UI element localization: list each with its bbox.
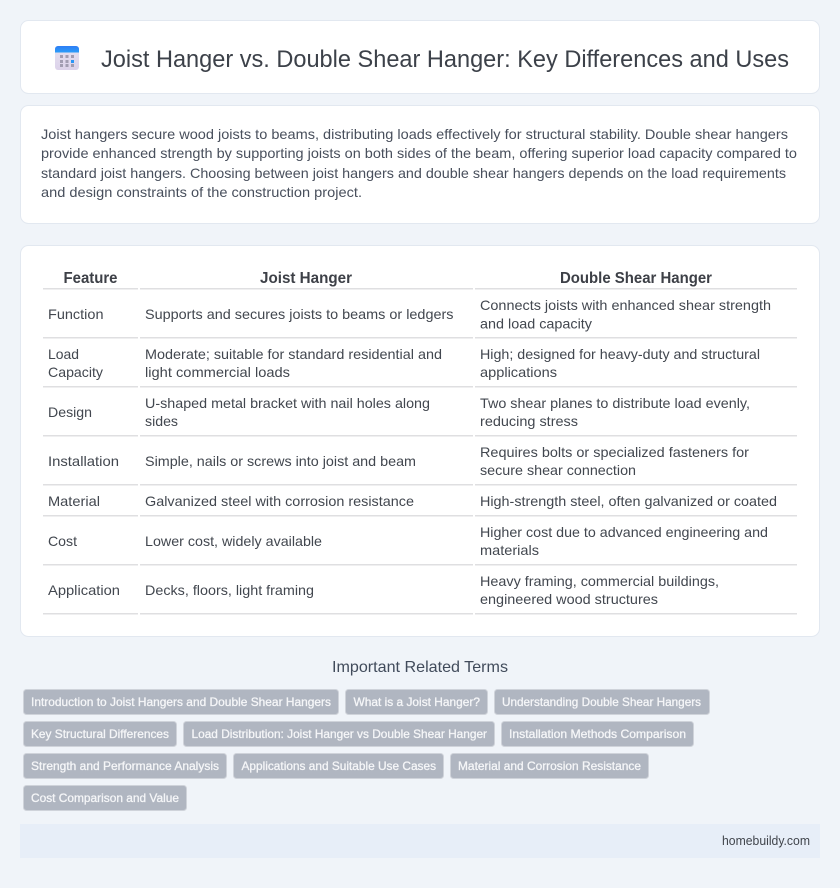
panel: related term tags: Cost Comparison and Value bbox=[31, 791, 179, 805]
row: cost: materials bbox=[480, 542, 539, 558]
title: Joist Hanger vs. Double Shear Hanger: Key Differences and Uses bbox=[101, 46, 789, 73]
row: application: Application bbox=[48, 582, 120, 598]
panel: related term tags: Strength and Performance Analysis bbox=[31, 759, 219, 773]
row: material bbox=[43, 493, 797, 516]
row: load capacity: light commercial loads bbox=[145, 364, 290, 380]
row: installation bbox=[43, 444, 797, 486]
row: design: reducing stress bbox=[480, 413, 578, 429]
row: cost: Lower cost, widely available bbox=[145, 533, 322, 549]
panel: related term tags: Material and Corrosion Resistance bbox=[458, 759, 641, 773]
row: application: Heavy framing, commercial buildings, bbox=[480, 573, 719, 589]
panel: related term tags: Applications and Suitable Use Cases bbox=[242, 759, 436, 773]
row: material: Galvanized steel with corrosion resistance bbox=[145, 493, 414, 509]
panel: related term tags bbox=[24, 690, 710, 810]
row: design bbox=[43, 395, 797, 436]
row: load capacity: Load bbox=[48, 346, 79, 362]
row: installation: Simple, nails or screws into joist and beam bbox=[145, 453, 416, 469]
intro paragraph: standard joist hangers. Choosing between joist hangers and double shear hangers depends on the load requirements bbox=[41, 165, 786, 181]
panel: related term tags: Introduction to Joist Hangers and Double Shear Hangers bbox=[31, 695, 331, 709]
panel: introduction bbox=[20, 106, 820, 224]
intro paragraph bbox=[41, 126, 797, 200]
row: cost bbox=[43, 524, 797, 566]
row: cost: Cost bbox=[48, 533, 77, 549]
panel: page title card bbox=[20, 20, 820, 94]
footer: homebuildy.com bbox=[722, 833, 810, 848]
intro paragraph: and design constraints of the construction project. bbox=[41, 184, 362, 200]
table header row: Feature bbox=[64, 270, 118, 287]
row: application bbox=[43, 573, 797, 614]
row: design: U-shaped metal bracket with nail holes along bbox=[145, 395, 430, 411]
heading: important related terms: Important Related Terms bbox=[332, 659, 508, 676]
panel: comparison table bbox=[20, 246, 820, 636]
row: material: Material bbox=[48, 493, 100, 509]
row: application: Decks, floors, light framing bbox=[145, 582, 314, 598]
row: load capacity: Moderate; suitable for standard residential and bbox=[145, 346, 442, 362]
row: load capacity bbox=[43, 346, 797, 388]
row: installation: Requires bolts or specialized fasteners for bbox=[480, 444, 749, 460]
table header row: Joist Hanger bbox=[260, 270, 352, 287]
row: material: High-strength steel, often galvanized or coated bbox=[480, 493, 777, 509]
panel: related term tags: Understanding Double Shear Hangers bbox=[502, 695, 701, 709]
table header row: Double Shear Hanger bbox=[560, 270, 712, 287]
panel: related term tags: Installation Methods Comparison bbox=[509, 727, 686, 741]
row: function bbox=[43, 297, 797, 338]
row: function: Function bbox=[48, 306, 104, 322]
row: design: Design bbox=[48, 404, 92, 420]
table header row bbox=[43, 270, 797, 290]
row: application: engineered wood structures bbox=[480, 591, 658, 607]
row: function: and load capacity bbox=[480, 316, 592, 332]
row: installation: Installation bbox=[48, 453, 119, 469]
footer bbox=[20, 824, 820, 858]
row: cost: Higher cost due to advanced engineering and bbox=[480, 524, 768, 540]
row: design: sides bbox=[145, 413, 178, 429]
row: load capacity: Capacity bbox=[48, 364, 103, 380]
panel: related term tags: Load Distribution: Joist Hanger vs Double Shear Hanger bbox=[192, 727, 487, 741]
row: function: Supports and secures joists to beams or ledgers bbox=[145, 306, 454, 322]
intro paragraph: Joist hangers secure wood joists to beams, distributing loads effectively for structural stability. Double shear hangers bbox=[41, 126, 788, 142]
row: design: Two shear planes to distribute load evenly, bbox=[480, 395, 750, 411]
panel: related term tags: Key Structural Differences bbox=[31, 727, 169, 741]
panel: related term tags: What is a Joist Hanger? bbox=[354, 695, 480, 709]
row: function: Connects joists with enhanced shear strength bbox=[480, 297, 771, 313]
row: load capacity: applications bbox=[480, 364, 557, 380]
row: load capacity: High; designed for heavy-duty and structural bbox=[480, 346, 760, 362]
icon: calendar bbox=[55, 46, 79, 70]
intro paragraph: provide enhanced strength by supporting joists on both sides of the beam, offering superior load capacity compared to bbox=[41, 145, 797, 161]
row: installation: secure shear connection bbox=[480, 462, 636, 478]
